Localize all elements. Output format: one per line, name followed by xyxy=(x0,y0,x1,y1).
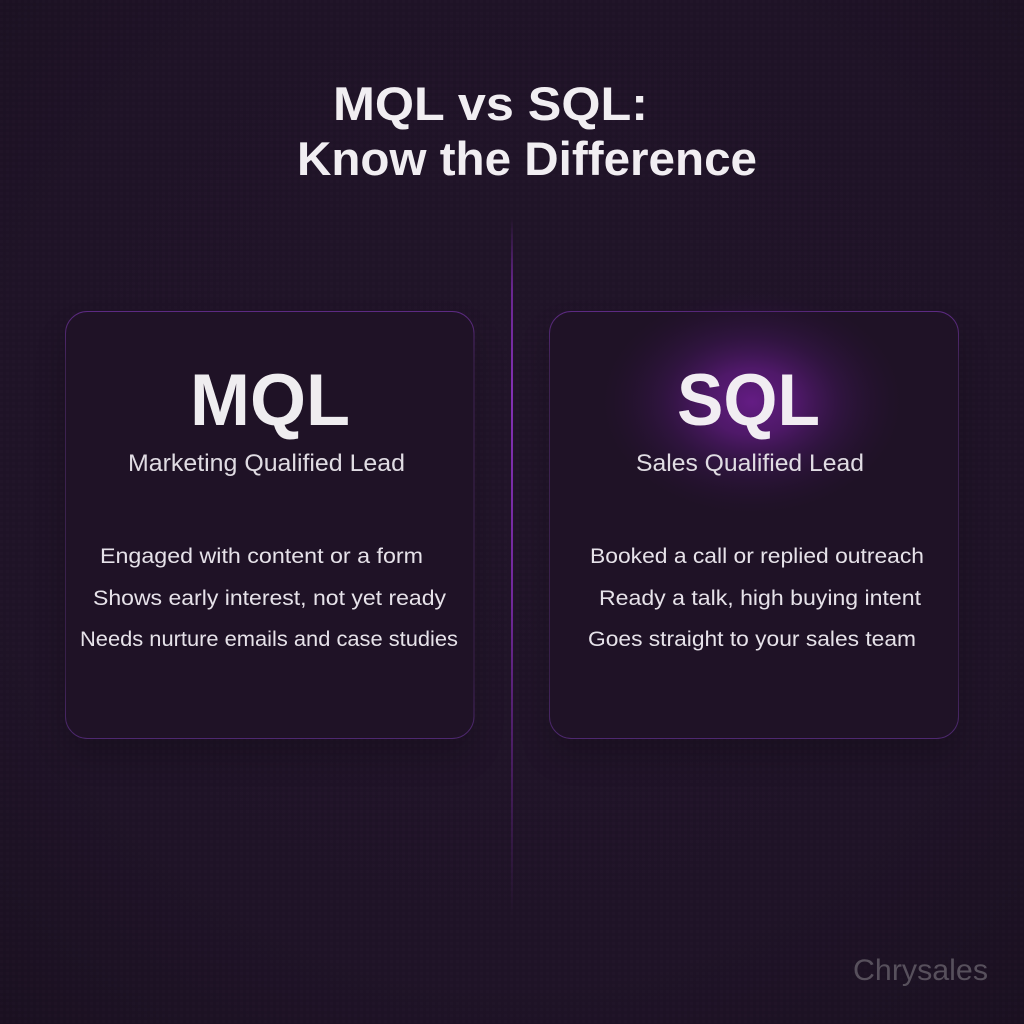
title xyxy=(297,77,757,185)
list: SQL traits: Booked a call or replied outreach xyxy=(590,544,924,568)
list: MQL traits: Shows early interest, not yet ready xyxy=(93,586,446,610)
list: MQL traits: Engaged with content or a form xyxy=(100,544,423,568)
panel: MQL xyxy=(65,312,474,757)
panel: SQL xyxy=(549,290,959,757)
glow behind SQL heading xyxy=(602,290,902,514)
subtitle: Sales Qualified Lead: Sales Qualified Lead xyxy=(636,450,864,477)
list: MQL traits xyxy=(80,544,458,651)
title: Know the Difference xyxy=(297,132,757,185)
heading: SQL: SQL xyxy=(677,360,820,441)
center divider xyxy=(511,218,513,915)
subtitle: Marketing Qualified Lead: Marketing Qualified Lead xyxy=(128,450,405,477)
watermark: Chrysales: Chrysales xyxy=(853,954,988,987)
heading: MQL: MQL xyxy=(190,360,350,441)
list: MQL traits: Needs nurture emails and case studies xyxy=(80,627,458,651)
card: SQL background xyxy=(550,312,958,738)
list: SQL traits xyxy=(588,544,924,651)
list: SQL traits: Ready a talk, high buying intent xyxy=(599,586,921,610)
card: MQL background xyxy=(66,312,474,738)
list: SQL traits: Goes straight to your sales team xyxy=(588,627,916,651)
title: MQL vs SQL: xyxy=(333,77,648,130)
